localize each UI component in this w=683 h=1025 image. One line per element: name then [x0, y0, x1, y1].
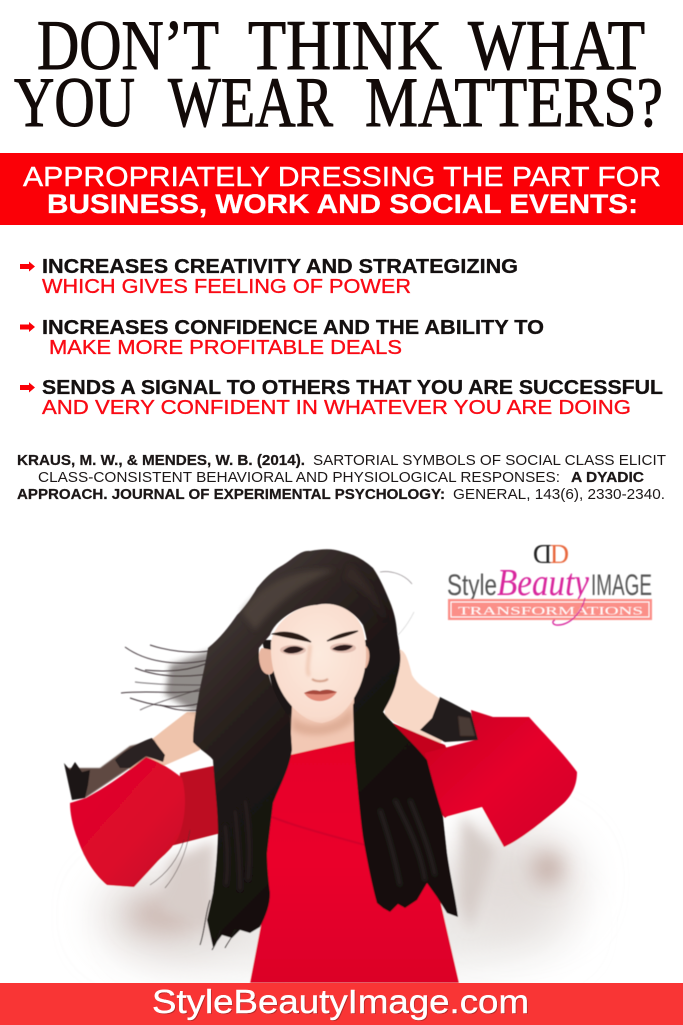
nose tip shadow	[312, 679, 328, 681]
benefit 1: INCREASES CREATIVITY AND STRATEGIZING	[42, 256, 518, 278]
citation	[17, 453, 666, 503]
citation: GENERAL, 143(6), 2330-2340.	[453, 487, 665, 503]
title: WEAR	[168, 64, 334, 142]
stray tips left lock	[200, 900, 235, 950]
hair shine streaks	[225, 800, 435, 890]
red subtitle banner: APPROPRIATELY DRESSING THE PART FOR	[23, 161, 661, 192]
citation: KRAUS, M. W., & MENDES, W. B. (2014).	[17, 453, 305, 469]
photo: woman in red dress	[64, 549, 580, 983]
logo monogram: D	[533, 539, 552, 569]
icon: arrow bullet 1	[20, 262, 35, 272]
nose shading	[308, 645, 310, 676]
arm left	[125, 712, 205, 778]
hair behind neck	[262, 640, 372, 760]
benefit 3: SENDS A SIGNAL TO OTHERS THAT YOU ARE SUCCESSFUL	[42, 377, 663, 399]
title	[14, 7, 663, 142]
lace cuff right	[420, 697, 478, 742]
hair flyaways	[121, 572, 414, 711]
logo wordmark	[447, 562, 652, 604]
benefit 3: AND VERY CONFIDENT IN WHATEVER YOU ARE DOING	[42, 397, 631, 419]
logo monogram: D	[550, 539, 569, 569]
neck shadow	[292, 706, 353, 735]
benefit 2: MAKE MORE PROFITABLE DEALS	[49, 337, 402, 359]
logo monogram	[533, 539, 569, 569]
red subtitle banner: BUSINESS, WORK AND SOCIAL EVENTS:	[47, 189, 638, 219]
arm right and hand	[385, 649, 455, 745]
logo transformations plate	[448, 598, 652, 625]
eye right	[330, 643, 356, 653]
sleeve right	[425, 710, 577, 847]
upper arm left	[163, 765, 225, 848]
neck	[290, 695, 354, 756]
sleeve left	[70, 757, 185, 887]
footer bar	[0, 983, 683, 1025]
upper arm right	[390, 722, 470, 818]
logo wordmark: Style	[447, 569, 497, 602]
benefit 2	[20, 317, 544, 359]
red subtitle banner	[0, 153, 683, 225]
citation: CLASS-CONSISTENT BEHAVIORAL AND PHYSIOLOGICAL RESPONSES:	[38, 470, 560, 486]
citation: SARTORIAL SYMBOLS OF SOCIAL CLASS ELICIT	[313, 453, 666, 469]
flyaway haze	[165, 648, 218, 712]
benefit 1	[20, 256, 518, 298]
logo	[447, 539, 652, 625]
footer bar: StyleBeautyImage.com	[152, 983, 529, 1020]
hair highlight	[242, 570, 335, 630]
benefit 2: INCREASES CONFIDENCE AND THE ABILITY TO	[42, 317, 544, 339]
eyebrow right	[327, 631, 358, 641]
dress body	[250, 741, 459, 983]
benefit 1: WHICH GIVES FEELING OF POWER	[42, 276, 411, 298]
logo transformations plate: TRANSFORMATIONS	[458, 604, 643, 618]
lips	[304, 690, 337, 701]
title: THINK	[248, 7, 442, 85]
citation: APPROACH. JOURNAL OF EXPERIMENTAL PSYCHOLOGY:	[17, 487, 445, 503]
eye left	[280, 645, 306, 655]
footer bar: StyleBeautyImage.com	[153, 984, 530, 1021]
ear right	[360, 646, 369, 668]
face	[259, 604, 369, 723]
hair highlight right top	[345, 565, 385, 620]
title: DON’T	[37, 7, 219, 85]
benefit 3	[20, 377, 663, 419]
dress fold	[272, 817, 365, 845]
title: WHAT	[468, 7, 645, 85]
title: YOU	[14, 64, 135, 142]
shadow on backdrop	[100, 815, 580, 975]
icon: arrow bullet 2	[20, 322, 35, 332]
head hair and long locks	[193, 549, 458, 947]
lace cuff left	[64, 738, 165, 800]
icon: arrow bullet 3	[20, 382, 35, 392]
logo wordmark: Beauty	[497, 562, 589, 604]
stray hair over left sleeve	[150, 830, 190, 888]
eyebrow left	[273, 632, 311, 642]
ear left	[259, 648, 274, 674]
citation: A DYADIC	[571, 470, 645, 486]
